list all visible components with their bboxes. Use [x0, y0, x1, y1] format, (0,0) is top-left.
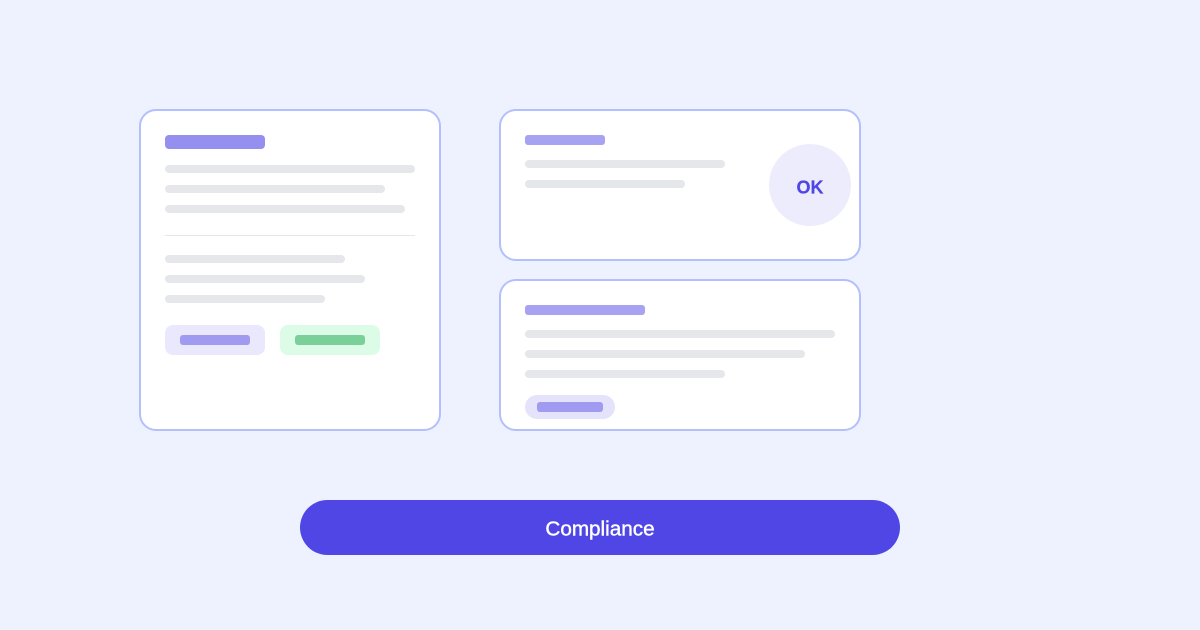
- banner: Compliance: Compliance: [545, 518, 655, 540]
- panel: bottom right card: [500, 280, 860, 430]
- text lines: [525, 330, 835, 378]
- button: purple: [165, 325, 265, 355]
- heading placeholder bar: [525, 135, 605, 145]
- text lines: [525, 160, 725, 188]
- panel: left document card: [140, 110, 440, 430]
- button: green: [280, 325, 380, 355]
- OK badge: OK: [796, 178, 824, 198]
- OK badge: [769, 144, 851, 226]
- heading placeholder bar: [165, 135, 265, 149]
- banner: Compliance: [300, 500, 900, 555]
- heading placeholder bar: [525, 305, 645, 315]
- panel: top right status card: [500, 110, 860, 260]
- text lines: top group: [165, 165, 415, 213]
- pill tag: [525, 395, 615, 419]
- text lines: bottom group: [165, 255, 365, 303]
